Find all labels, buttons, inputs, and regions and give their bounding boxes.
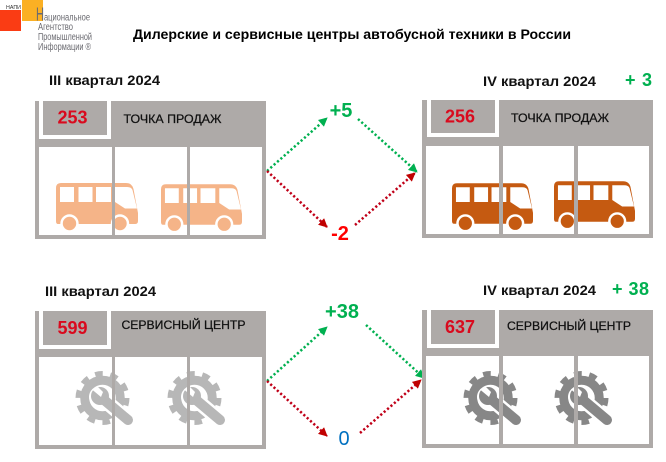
panel: sales points Q3: [35, 101, 266, 239]
arrows: sales change: [267, 118, 417, 227]
arrows: service change: [267, 325, 424, 436]
icon: gear dark 2: [557, 374, 608, 422]
label: sales point: ТОЧКА ПРОДАЖ: [124, 112, 222, 126]
logo: Промышленной: [38, 32, 92, 43]
label: service center: СЕРВИСНЫЙ ЦЕНТР: [122, 317, 246, 332]
icon: bus light 2: [161, 184, 242, 233]
value: minus 2: -2: [331, 223, 349, 245]
value: plus 5: +5: [330, 100, 352, 122]
icon: bus dark 1: [452, 183, 533, 232]
title: Дилерские и сервисные центры автобусной техники в России: [133, 27, 571, 42]
panel: sales points Q4: [422, 100, 653, 238]
delta: plus 3: + 3: [625, 70, 652, 90]
value: plus 38: +38: [325, 301, 359, 323]
icon: gear dark 1: [466, 374, 517, 422]
panel: service centers Q4: [422, 310, 653, 448]
value: zero: 0: [338, 428, 350, 450]
label: service center: СЕРВИСНЫЙ ЦЕНТР: [507, 318, 631, 333]
logo: Агентство: [38, 22, 73, 33]
logo: ациональное: [44, 12, 90, 24]
icon: bus light 1: [56, 183, 138, 233]
icon: bus dark 2: [554, 181, 635, 230]
panel: service centers Q3: [35, 311, 266, 449]
heading: III quarter sales: III квартал 2024: [49, 72, 160, 88]
logo: Н: [36, 4, 44, 24]
value: 637: 637: [445, 317, 475, 337]
value: 599: 599: [57, 318, 88, 338]
logo: Информации ®: [38, 41, 91, 53]
logo: НАПИ: [6, 5, 21, 11]
icon: gear light 1: [78, 374, 129, 422]
icon: gear light 2: [170, 374, 221, 422]
value: 256: 256: [445, 106, 475, 126]
delta: plus 38: + 38: [612, 279, 649, 299]
heading: IV quarter service: IV квартал 2024: [483, 282, 596, 298]
label: sales point: ТОЧКА ПРОДАЖ: [511, 111, 609, 125]
heading: IV quarter sales: IV квартал 2024: [483, 73, 596, 89]
logo: [0, 0, 92, 53]
heading: III quarter service: III квартал 2024: [45, 283, 156, 299]
value: 253: 253: [57, 108, 88, 128]
